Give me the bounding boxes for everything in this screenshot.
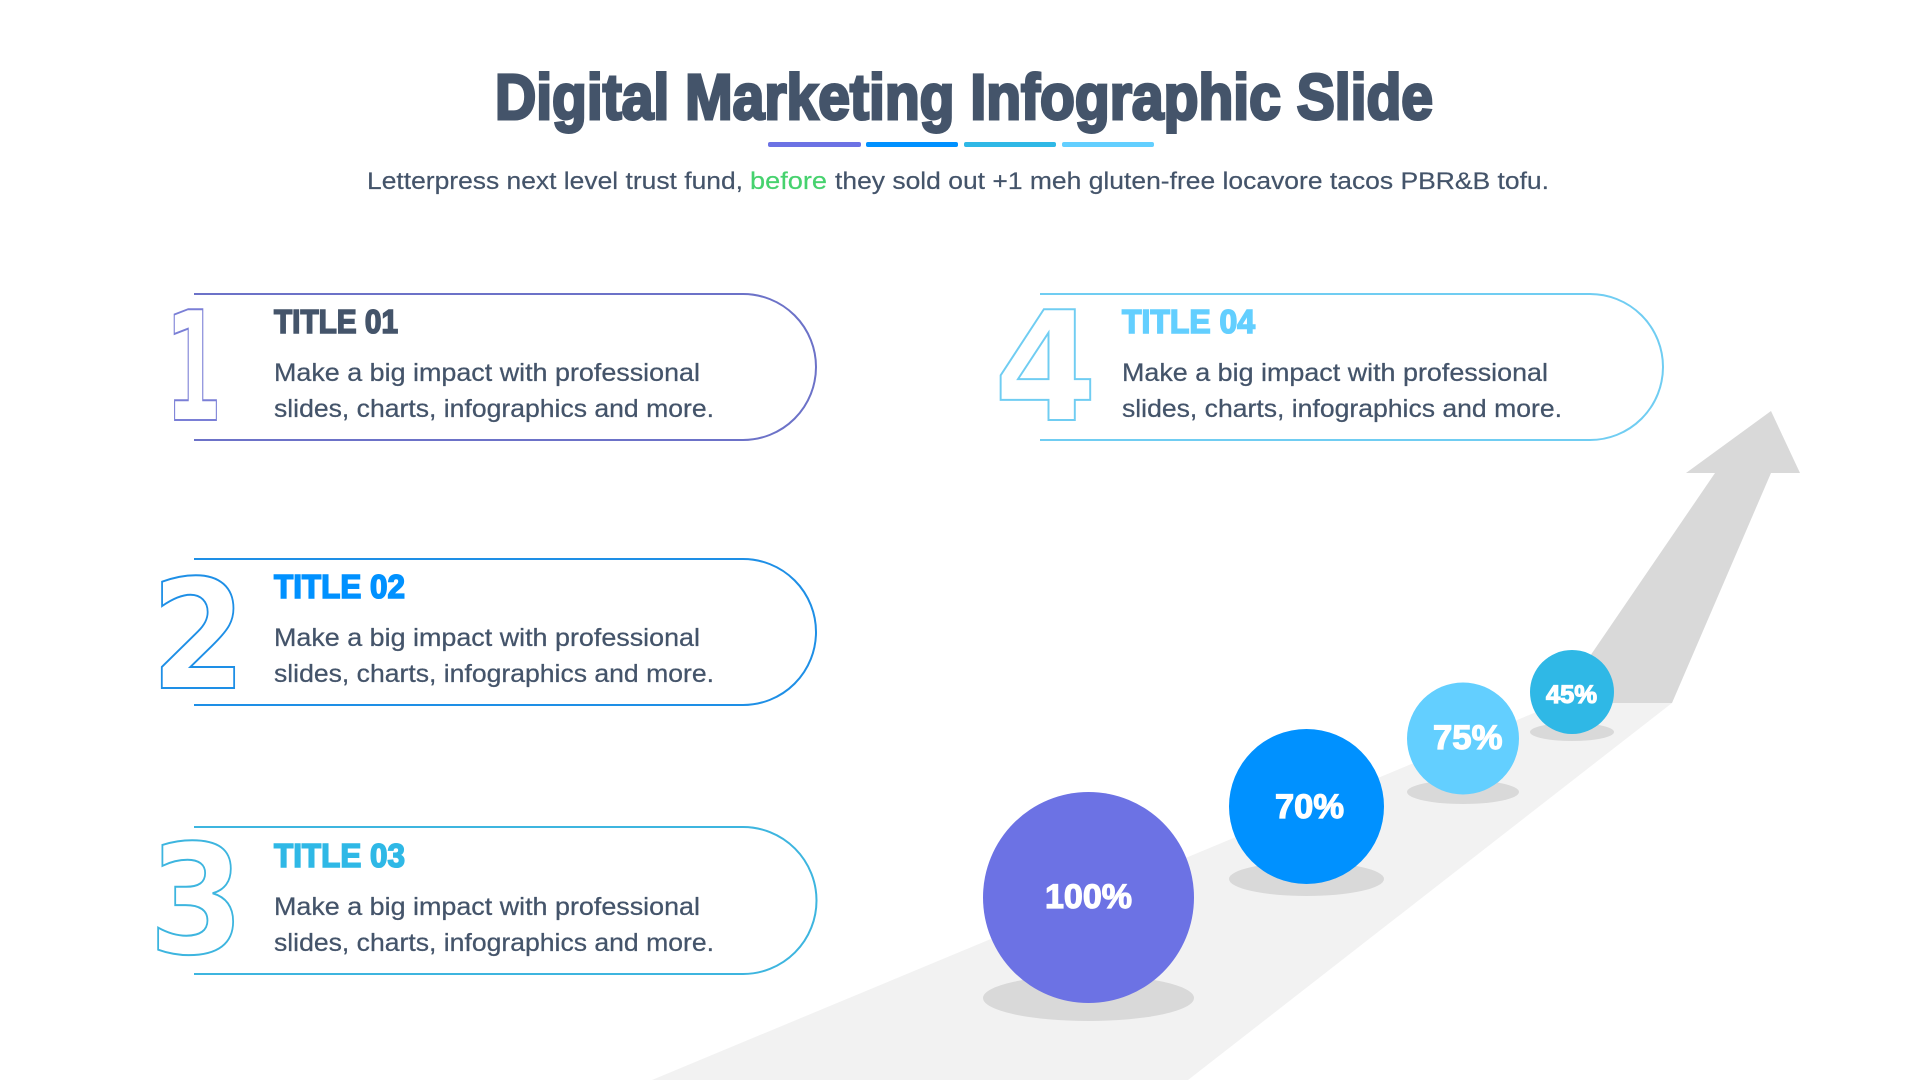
shadow 100% [983, 975, 1194, 1021]
body text 04 [1122, 359, 1562, 423]
pill outline 01 [194, 294, 816, 440]
shadow 45% [1530, 723, 1614, 741]
body text 03: slides, charts, infographics and more. [274, 929, 714, 957]
body text 01: slides, charts, infographics and more. [274, 395, 714, 423]
body text 02: Make a big impact with professional [274, 624, 700, 652]
pill outline 02 [194, 559, 816, 705]
road [652, 703, 1672, 1080]
pill outline 03 [194, 827, 816, 974]
title: Digital Marketing Infographic Slide [495, 61, 1433, 133]
panel: title 01 [165, 279, 816, 456]
heading 01: TITLE 01 [274, 303, 398, 340]
marker: 100% [983, 792, 1194, 1021]
circle 70% [1229, 729, 1384, 884]
subtitle: Letterpress next level trust fund, [367, 168, 743, 195]
label 100%: 100% [1045, 878, 1132, 916]
body text 03: Make a big impact with professional [274, 893, 700, 921]
number 3: 3 [149, 812, 244, 989]
heading 02: TITLE 02 [274, 568, 405, 605]
circle 75% [1407, 682, 1519, 794]
label 45%: 45% [1546, 681, 1597, 709]
label 75%: 75% [1433, 719, 1502, 757]
body text 01: Make a big impact with professional [274, 359, 700, 387]
body text 04: slides, charts, infographics and more. [1122, 395, 1562, 423]
panel: title 03 [149, 812, 816, 989]
circle 100% [983, 792, 1194, 1003]
label 70%: 70% [1275, 788, 1344, 826]
body text 04: Make a big impact with professional [1122, 359, 1548, 387]
marker: 75% [1407, 682, 1519, 804]
body text 02 [274, 624, 714, 688]
subtitle: they sold out +1 meh gluten-free locavore tacos PBR&B tofu. [835, 168, 1549, 195]
heading 03: TITLE 03 [274, 837, 405, 874]
body text 03 [274, 893, 714, 957]
subtitle [367, 168, 1549, 195]
number 4: 4 [994, 279, 1097, 456]
heading 04: TITLE 04 [1122, 303, 1256, 340]
number 1: 1 [165, 279, 222, 456]
shadow 70% [1229, 862, 1384, 896]
number 2: 2 [151, 547, 246, 724]
body text 01 [274, 359, 714, 423]
arrow [1558, 411, 1800, 703]
pill outline 04 [1040, 294, 1663, 440]
shadow 75% [1407, 780, 1519, 804]
panel: title 02 [151, 547, 816, 724]
marker: 45% [1530, 650, 1614, 741]
circle 45% [1530, 650, 1614, 734]
title underline bars [768, 142, 1154, 147]
body text 02: slides, charts, infographics and more. [274, 660, 714, 688]
marker: 70% [1229, 729, 1384, 896]
subtitle: before [750, 168, 827, 195]
panel: title 04 [994, 279, 1663, 456]
